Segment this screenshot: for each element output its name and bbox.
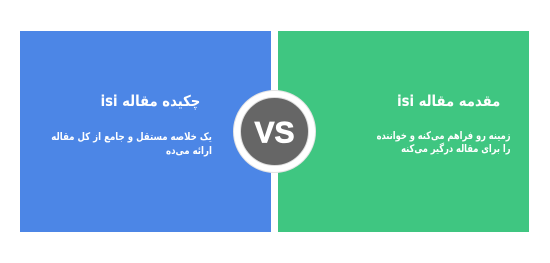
panel: introduction (green) — [278, 31, 529, 232]
text: introduction description: زمینه رو فراهم می‌کنه و خواننده — [377, 130, 511, 142]
text: introduction description — [377, 130, 511, 155]
badge: VS: VS — [254, 116, 295, 150]
heading: introduction: مقدمه مقاله isi — [397, 92, 500, 110]
text: abstract description — [51, 131, 212, 157]
text: abstract description: یک خلاصه مستقل و جامع از کل مقاله — [51, 131, 212, 143]
panel: abstract (blue) — [20, 31, 271, 232]
text: introduction description: را برای مقاله درگیر می‌کنه — [402, 143, 511, 155]
heading: abstract: چکیده مقاله isi — [100, 92, 200, 110]
text: abstract description: ارائه می‌ده — [166, 145, 212, 157]
badge: VS — [233, 90, 316, 173]
